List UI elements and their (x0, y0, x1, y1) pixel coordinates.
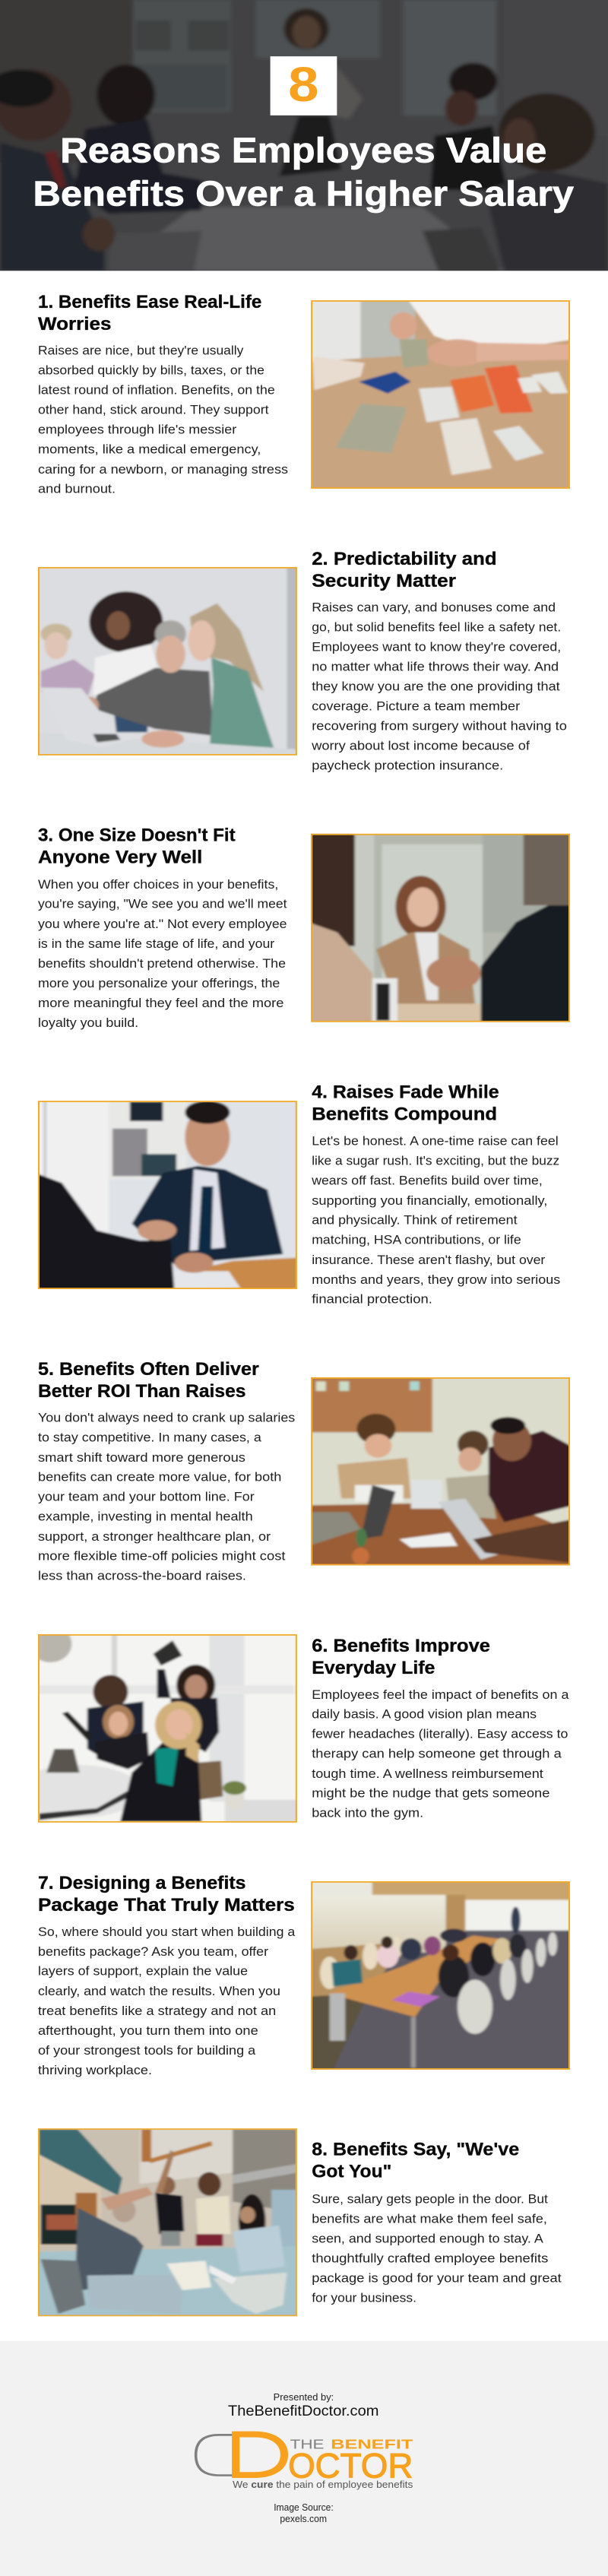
body text 2: coverage. Picture a team member (312, 699, 520, 713)
body text 3: more you personalize your offerings, the (38, 976, 280, 990)
body text 6: fewer headaches (literally). Easy access to (312, 1727, 568, 1741)
body text 5: You don't always need to crank up salaries (38, 1411, 295, 1424)
presented by credit: TheBenefitDoctor.com (228, 2402, 378, 2419)
panel: reason 8 (35, 2126, 562, 2318)
heading 5: 5. Benefits Often Deliver (38, 1359, 259, 1380)
body text 8: Sure, salary gets people in the door. But (312, 2193, 548, 2207)
panel: reason 3 (38, 825, 574, 1030)
heading 6 (312, 1636, 490, 1678)
photo: celebrating businesswomen (38, 1634, 297, 1823)
body text 4: insurance. These aren't flashy, but over (312, 1253, 545, 1267)
body text 2: Raises can vary, and bonuses come and (312, 600, 556, 614)
panel: reason 1 (38, 292, 574, 496)
body text 6: daily basis. A good vision plan means (312, 1707, 537, 1721)
body text 8: seen, and supported enough to stay. A (312, 2232, 543, 2246)
body text 3: more meaningful they feel and the more (38, 996, 284, 1010)
panel: reason 4 (35, 1082, 560, 1306)
body text 6: tough time. A wellness reimbursement (312, 1766, 543, 1781)
image source credit (274, 2502, 334, 2524)
heading 6: 6. Benefits Improve (312, 1636, 490, 1656)
photo: handshake at an interview (309, 831, 574, 1024)
body text 5: smart shift toward more generous (38, 1450, 245, 1464)
body text 1: other hand, stick around. They support (38, 403, 269, 417)
body text 3: loyalty you build. (38, 1016, 138, 1030)
heading 8: Got You" (312, 2161, 391, 2182)
body text 6 (312, 1687, 569, 1820)
body text 8: thoughtfully crafted employee benefits (312, 2252, 548, 2266)
body text 1: employees through life's messier (38, 423, 236, 436)
body text 7: afterthought, you turn them into one (38, 2023, 258, 2038)
body text 1: and burnout. (38, 482, 116, 496)
body text 4: like a sugar rush. It's exciting, but the buzz (312, 1154, 559, 1168)
body text 7: clearly, and watch the results. When you (38, 1984, 280, 1998)
number badge: 8: 8 (288, 57, 318, 112)
heading 2: 2. Predictability and (312, 549, 497, 569)
heading 8: 8. Benefits Say, "We've (312, 2139, 519, 2159)
heading 4: 4. Raises Fade While (312, 1082, 499, 1102)
body text 4: months and years, they grow into serious (312, 1272, 560, 1287)
body text 8 (312, 2193, 562, 2305)
body text 1: Raises are nice, but they're usually (38, 344, 244, 357)
body text 2: recovering from surgery without having to (312, 719, 567, 733)
body text 6: back into the gym. (312, 1806, 423, 1820)
panel: reason 6 (14, 1625, 569, 1825)
heading 1 (38, 292, 261, 334)
body text 2: no matter what life throws their way. And (312, 660, 559, 673)
body text 5: more flexible time-off policies might cost (38, 1549, 286, 1563)
body text 5: your team and your bottom line. For (38, 1490, 255, 1503)
body text 4: Let's be honest. A one-time raise can feel (312, 1134, 559, 1148)
body text 1: caring for a newborn, or managing stress (38, 462, 288, 476)
logo: The Benefit Doctor: We cure the pain of employee benefits (233, 2479, 413, 2491)
heading 3: Anyone Very Well (38, 848, 202, 867)
body text 7: of your strongest tools for building a (38, 2043, 255, 2058)
body text 7: So, where should you start when building a (38, 1925, 295, 1939)
body text 6: Employees feel the impact of benefits on a (312, 1687, 569, 1702)
heading 8 (312, 2139, 519, 2182)
body text 1: latest round of inflation. Benefits, on the (38, 383, 275, 397)
body text 3: you where you're at." Not every employee (38, 917, 287, 931)
body text 5: to stay competitive. In many cases, a (38, 1431, 261, 1444)
photo: money and receipts on a table (306, 297, 574, 492)
photo: team collaborating at a table (309, 1374, 574, 1568)
title: Benefits Over a Higher Salary (33, 175, 575, 214)
logo: The Benefit Doctor (196, 2435, 413, 2491)
body text 7: benefits package? Ask you team, offer (38, 1944, 268, 1958)
title (33, 131, 575, 214)
hero banner (0, 0, 608, 278)
body text 5: example, investing in mental health (38, 1510, 253, 1523)
heading 2 (312, 549, 497, 591)
body text 1: moments, like a medical emergency, (38, 442, 261, 456)
body text 3: is in the same life stage of life, and your (38, 936, 274, 951)
panel: reason 7 (38, 1873, 574, 2077)
body text 2: worry about lost income because of (311, 739, 530, 753)
body text 4: matching, HSA contributions, or life (312, 1233, 521, 1247)
body text 4: and physically. Think of retirement (312, 1213, 518, 1227)
body text 6: therapy can help someone get through a (312, 1747, 562, 1760)
photo: team around a laptop (35, 564, 300, 758)
image source credit: Image Source: (274, 2502, 334, 2514)
photo: large boardroom meeting (309, 1878, 574, 2073)
heading 7: 7. Designing a Benefits (38, 1873, 245, 1893)
heading 3 (38, 825, 236, 867)
hero photo: team meeting with dark overlay (0, 0, 608, 278)
photo: smiling man shaking hands (35, 1098, 300, 1291)
heading 5 (38, 1359, 259, 1402)
heading 7: Package That Truly Matters (38, 1895, 295, 1915)
body text 8: for your business. (312, 2292, 416, 2305)
photo: coworkers talking on a sofa (35, 2126, 300, 2318)
heading 1: 1. Benefits Ease Real-Life (38, 292, 261, 312)
body text 3: you're saying, "We see you and we'll meet (38, 897, 287, 911)
heading 7 (38, 1873, 295, 1915)
body text 2: go, but solid benefits feel like a safety net. (312, 619, 561, 634)
panel: reason 5 (38, 1359, 574, 1583)
title: Reasons Employees Value (60, 131, 546, 170)
body text 3: benefits shouldn't pretend otherwise. The (38, 956, 286, 970)
body text 5: benefits can create more value, for both (38, 1470, 281, 1484)
body text 4: wears off fast. Benefits build over time, (311, 1174, 543, 1187)
heading 4: Benefits Compound (312, 1104, 497, 1124)
body text 4 (311, 1134, 560, 1306)
body text 3 (38, 877, 287, 1030)
number badge: 8 (271, 56, 337, 116)
presented by credit (228, 2392, 378, 2419)
body text 1: absorbed quickly by bills, taxes, or the (38, 363, 264, 377)
body text 6: might be the nudge that gets someone (312, 1786, 550, 1800)
body text 3: When you offer choices in your benefits, (38, 877, 278, 891)
heading 3: 3. One Size Doesn't Fit (38, 825, 236, 845)
heading 1: Worries (38, 314, 111, 334)
body text 5: support, a stronger healthcare plan, or (38, 1529, 271, 1544)
logo: The Benefit Doctor: THE (290, 2437, 325, 2452)
body text 8: package is good for your team and great (312, 2272, 562, 2286)
body text 7: treat benefits like a strategy and not an (38, 2004, 276, 2018)
body text 7: layers of support, explain the value (38, 1964, 248, 1978)
heading 4 (312, 1082, 499, 1124)
heading 2: Security Matter (312, 571, 456, 591)
image source credit: pexels.com (280, 2514, 327, 2524)
body text 2 (311, 600, 567, 772)
logo: The Benefit Doctor: BENEFIT (331, 2437, 413, 2452)
body text 7: thriving workplace. (38, 2063, 152, 2077)
body text 1 (38, 344, 288, 496)
body text 4: financial protection. (312, 1292, 432, 1306)
body text 8: benefits are what make them feel safe, (312, 2213, 547, 2226)
body text 4: supporting you financially, emotionally, (312, 1193, 547, 1208)
body text 5: less than across-the-board raises. (38, 1569, 246, 1583)
body text 2: Employees want to know they're covered, (312, 640, 561, 654)
heading 5: Better ROI Than Raises (38, 1381, 245, 1402)
body text 5 (38, 1411, 295, 1583)
logo: The Benefit Doctor: OCTOR (288, 2447, 413, 2486)
footer panel (0, 2341, 608, 2576)
heading 6: Everyday Life (312, 1658, 435, 1678)
body text 2: they know you are the one providing that (312, 680, 560, 693)
body text 2: paycheck protection insurance. (312, 759, 503, 772)
panel: reason 2 (35, 549, 567, 772)
body text 7 (38, 1925, 295, 2077)
presented by credit: Presented by: (274, 2392, 334, 2403)
